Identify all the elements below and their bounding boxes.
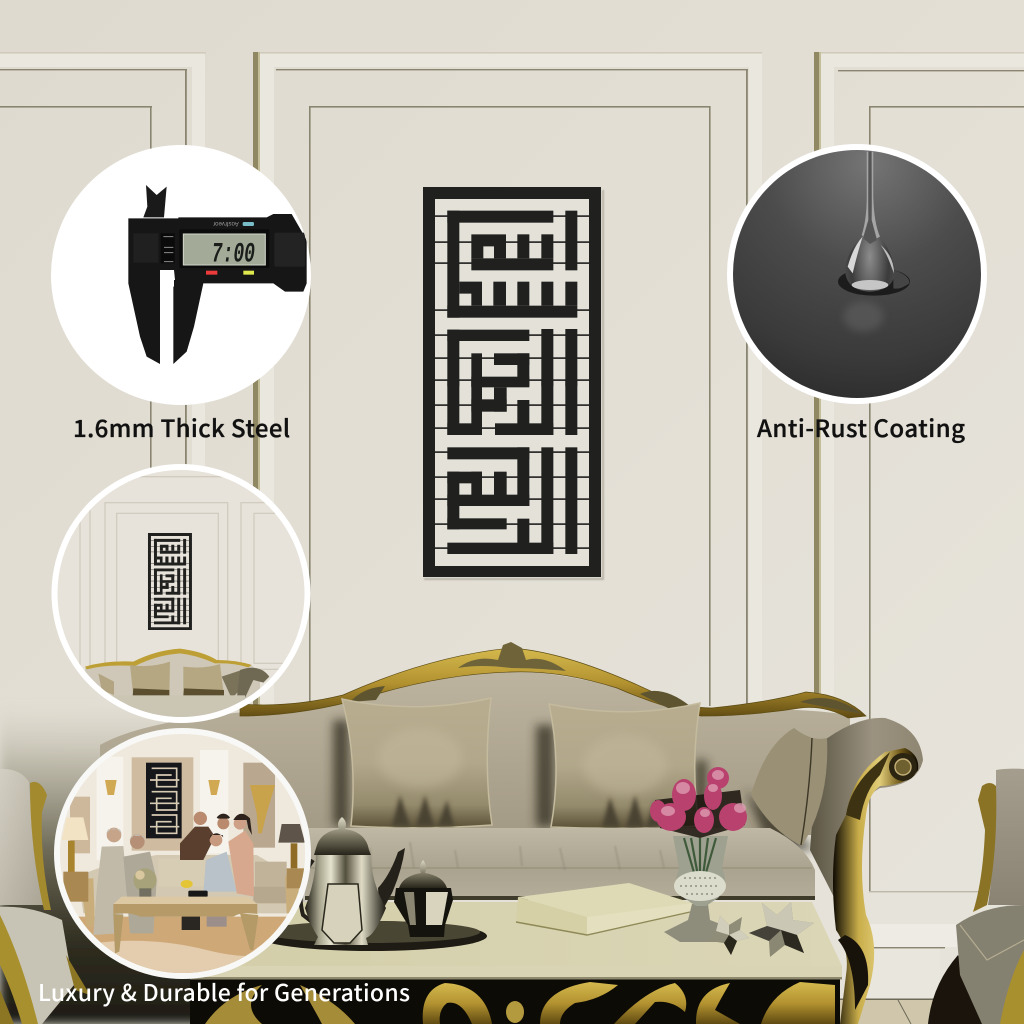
caption: coating: Anti-Rust Coating [757, 409, 965, 444]
water drop icon [838, 152, 910, 332]
water drop circle [727, 144, 987, 404]
woman in blue with child [203, 833, 237, 927]
small star [709, 916, 749, 955]
room view circle [52, 464, 321, 723]
sofa arm roll [810, 718, 923, 905]
left shoulder carving [350, 686, 385, 702]
caliper icon: Aosfrveor [213, 220, 239, 226]
star ornaments [709, 902, 814, 957]
coffee table [190, 902, 842, 1024]
family room wall [53, 730, 313, 930]
vase glass [673, 836, 728, 906]
teapot body [305, 853, 386, 945]
sofa carved gold frame [240, 648, 866, 718]
teapot spout and handle [378, 848, 405, 915]
right chair dark leg [928, 955, 985, 1024]
caliper icon: 7:00 [212, 239, 255, 270]
arm scroll [889, 753, 917, 781]
carpet floor [78, 916, 286, 973]
older man [123, 834, 157, 933]
mini sofa [85, 648, 270, 717]
woman in pink [228, 814, 254, 897]
sofa [78, 855, 300, 913]
right armchair [928, 769, 1024, 1024]
vase base [664, 904, 728, 942]
mini sofa back [85, 651, 260, 700]
rose vase [650, 767, 747, 942]
carved coffee table [113, 897, 258, 953]
left chair gold trim [30, 782, 51, 910]
mini pillows [130, 662, 170, 696]
small side pillow [751, 728, 827, 846]
young man [217, 814, 230, 829]
tea set [257, 817, 487, 951]
pillow left [342, 698, 492, 828]
caption: thickness: 1.6mm Thick Steel [73, 409, 290, 444]
mini calligraphy [148, 533, 192, 630]
dark stem mass [655, 790, 745, 838]
right chair cushion [956, 905, 1024, 1024]
foreground sofa edge [227, 699, 320, 723]
caliper icon [128, 185, 307, 364]
mini sofa arm [237, 668, 269, 700]
teapot inner panel [322, 884, 362, 943]
teapot lid [314, 817, 371, 855]
mini seat [112, 695, 245, 717]
mini gold frame [85, 649, 252, 669]
book [516, 883, 692, 935]
left chair cushion [0, 907, 74, 1024]
sugar bowl [394, 860, 453, 937]
older woman [93, 828, 127, 935]
mini wall panels [79, 476, 284, 670]
sconces [105, 780, 220, 795]
carved leaf on arm [846, 752, 890, 820]
shaded area behind left side of sofa [0, 705, 300, 1024]
large star [749, 902, 814, 957]
man in brown [180, 812, 215, 930]
roses [650, 767, 747, 833]
underside with gold ornament [190, 978, 840, 1024]
caption: durability: Luxury & Durable for Generations [38, 974, 410, 1008]
kufic calligraphy wall art [423, 187, 603, 579]
seat cushion [305, 828, 815, 900]
table top surface [190, 902, 842, 966]
right shoulder carving [640, 691, 862, 714]
pillow right [549, 703, 700, 828]
crest ornament [458, 642, 566, 671]
family photo circle [53, 728, 313, 983]
mini calligraphy [146, 763, 182, 838]
sofa back upholstery [100, 670, 850, 835]
beaded glass [674, 871, 726, 901]
right chair gold trim [973, 783, 996, 912]
flower arrangement [133, 868, 208, 898]
sofa [100, 642, 923, 1024]
caliper circle [51, 145, 311, 405]
table lamps [62, 817, 88, 840]
floor [830, 998, 1024, 1024]
tray [257, 921, 487, 951]
pillow shadows [333, 720, 815, 850]
gold arm front and leg [833, 748, 918, 1024]
left armchair [0, 769, 90, 1024]
